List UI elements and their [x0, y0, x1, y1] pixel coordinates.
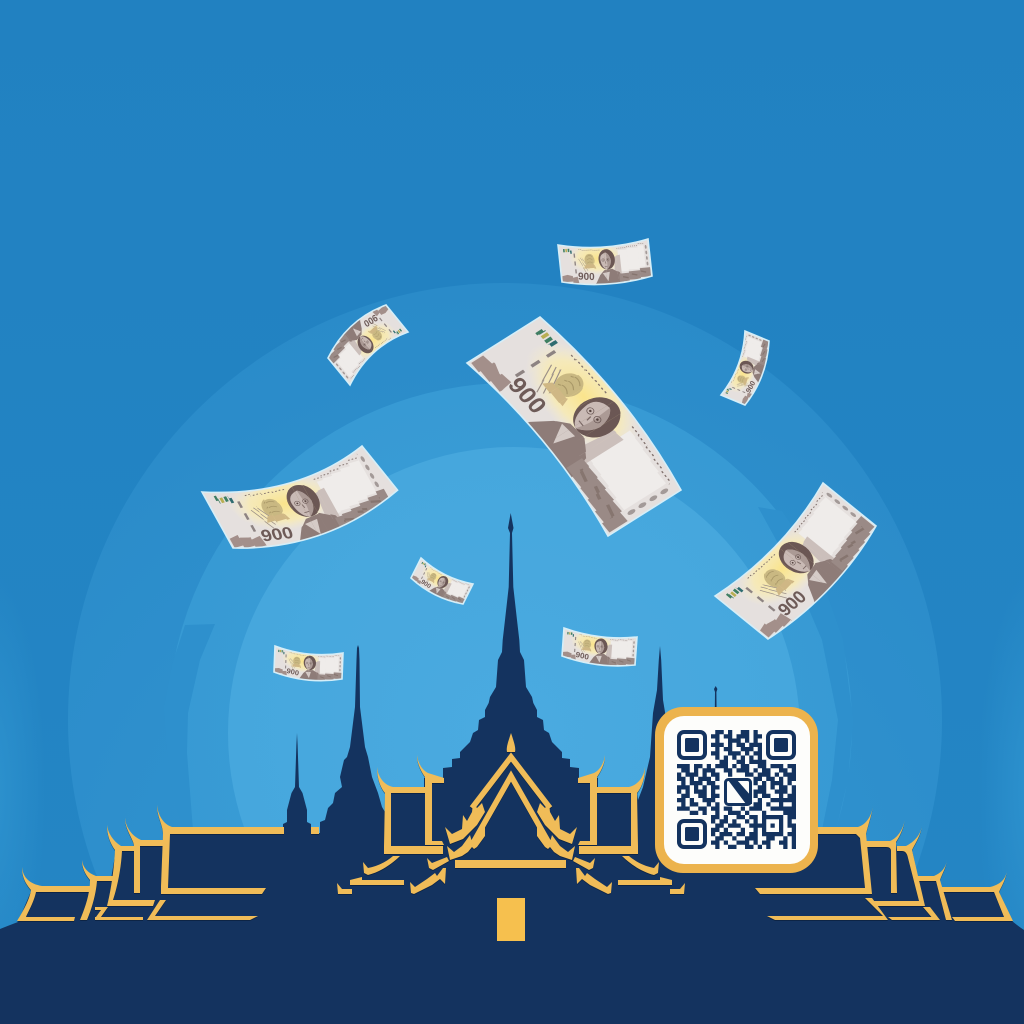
banknote: large right — [714, 482, 877, 640]
banknote: top — [558, 235, 653, 287]
QR centre logo — [726, 780, 752, 804]
temple door — [497, 898, 525, 941]
QR code card — [655, 707, 818, 873]
banknote: large right: 900 — [774, 587, 811, 620]
finder: top left — [679, 732, 705, 758]
banknote: large centre — [466, 316, 682, 538]
banknote: large centre: 900 — [502, 373, 552, 419]
background: middle glow circle — [168, 383, 852, 1024]
background: outer glow circle — [68, 283, 942, 1024]
gold roof outlines: right wings — [755, 805, 1013, 921]
banknote: small right of spire: 900 — [575, 650, 590, 662]
banknote: small centre — [409, 556, 474, 608]
banknote: upper left: 900 — [362, 312, 379, 329]
banknote: small left: 900 — [286, 666, 300, 678]
background: darker wedges cut into the middle circle — [164, 507, 853, 830]
card face — [664, 716, 810, 864]
finder: bottom left — [679, 821, 705, 847]
banknote: large left — [200, 444, 399, 549]
background: lighter lower-left edge — [0, 570, 45, 1010]
banknote: upper left — [327, 304, 410, 386]
finder: top right — [768, 732, 794, 758]
banknote: top: 900 — [578, 271, 595, 283]
banknote: small left — [274, 643, 343, 684]
banknote: large left: 900 — [258, 523, 296, 545]
banknote: upper right small: 900 — [744, 379, 757, 395]
banknote: upper right small — [719, 330, 774, 407]
banknote: small right of spire — [562, 625, 637, 669]
QR modules — [677, 732, 796, 847]
temple silhouette — [0, 513, 1024, 1024]
background: inner glow circle — [228, 447, 800, 1019]
gold roof outlines: left wings — [17, 805, 319, 921]
background: lighter lower-right edge — [979, 570, 1024, 1010]
central gold gable and wing frames — [337, 733, 685, 894]
small far spire behind QR card — [714, 686, 717, 712]
banknote: small centre: 900 — [419, 579, 433, 590]
card border — [655, 707, 818, 873]
